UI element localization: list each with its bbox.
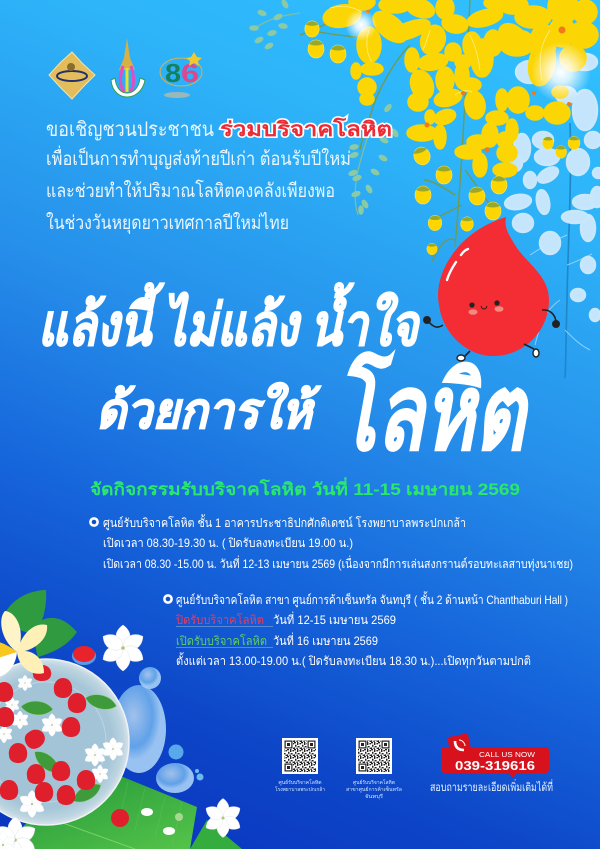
intro line 4: ในช่วงวันหยุดยาวเทศกาลปีใหม่ไทย (46, 212, 289, 235)
red label (441, 747, 549, 778)
open date: วันที่ 16 เมษายน 2569 (273, 632, 378, 648)
illustration: jasmine flowers (0, 625, 243, 849)
logo: 86 anniversary (160, 52, 202, 98)
QR caption 2 (346, 779, 402, 800)
location block 2 (164, 591, 568, 669)
QR code 1 (282, 738, 318, 774)
closed dates: วันที่ 12-15 เมษายน 2569 (273, 611, 396, 627)
event date heading: จัดกิจกรรมรับบริจาคโลหิต วันที่ 11-15 เมษายน 2569 (90, 477, 520, 499)
title big word: โลหิต (335, 350, 529, 472)
illustration: banana leaves (0, 775, 242, 849)
illustration: green bud sprigs (249, 0, 400, 215)
intro line 3: และช่วยทำให้ปริมาณโลหิตคงคลังเพียงพอ (46, 179, 335, 202)
call box (430, 733, 553, 794)
title line 1: แล้งนี้ ไม่แล้ง น้ำใจ (38, 282, 420, 358)
QR caption 1: ศูนย์รับบริจาคโลหิต (278, 779, 322, 786)
intro line 1 with highlight: ร่วมบริจาคโลหิต (220, 117, 392, 141)
illustration: water bubbles (112, 667, 204, 793)
bullet (164, 595, 172, 603)
closed label: ปิดรับบริจาคโลหิต (175, 613, 264, 627)
open label: เปิดรับบริจาคโลหิต (176, 634, 267, 648)
QR caption 1 (275, 779, 325, 793)
hours line 1: เปิดเวลา 08.30-19.30 น. ( ปิดรับลงทะเบียน 19.00 น.) (103, 536, 353, 550)
intro line 2: เพื่อเป็นการทำบุญส่งท้ายปีเก่า ต้อนรับปีใหม่ (46, 145, 351, 171)
illustration: plumeria and leaves (0, 590, 77, 677)
open hours: ตั้งแต่เวลา 13.00-19.00 น.( ปิดรับลงทะเบียน 18.30 น.)...เปิดทุกวันตามปกติ (176, 652, 531, 669)
logos (49, 38, 202, 99)
logo: 86 anniversary: 8 (165, 58, 181, 88)
intro text (46, 117, 392, 235)
illustration: bowl with petals (0, 659, 129, 825)
logo: royal crown emblem (111, 38, 145, 97)
location block 1 (90, 514, 573, 572)
QR caption 1: โรงพยาบาลพระปกเกล้า (275, 786, 325, 793)
QR caption 2: สาขาศูนย์การค้าเซ็นทรัล (346, 785, 402, 793)
bullet (90, 518, 98, 526)
phone number: 039-319616 (455, 759, 535, 773)
QR caption 2: ศูนย์รับบริจาคโลหิต (353, 779, 395, 786)
title line 2: ด้วยการให้ (96, 382, 321, 439)
logo: gold diamond emblem (49, 52, 95, 99)
QR codes (275, 738, 402, 800)
illustration: loose petals and buds (72, 646, 183, 835)
main title (38, 282, 529, 472)
illustration: pale blue flower branch (504, 54, 600, 378)
logo: 86 anniversary: 6 (181, 58, 199, 88)
intro line 1 with highlight (46, 117, 392, 141)
location name: ศูนย์รับบริจาคโลหิต ชั้น 1 อาคารประชาธิปกศักดิเดชน์ โรงพยาบาลพระปกเกล้า (103, 514, 466, 531)
QR caption 2: จันทบุรี (365, 793, 383, 800)
call us now: CALL US NOW (479, 752, 535, 759)
enquiry line: สอบถามรายละเอียดเพิ่มเติมได้ที่ (430, 779, 553, 794)
phone icon tag (447, 733, 472, 757)
intro line 1 with highlight: ขอเชิญชวนประชาชน (46, 119, 214, 141)
illustration: golden shower flowers (300, 0, 597, 262)
QR code 2 (356, 738, 392, 774)
mascot: blood drop (423, 217, 560, 361)
